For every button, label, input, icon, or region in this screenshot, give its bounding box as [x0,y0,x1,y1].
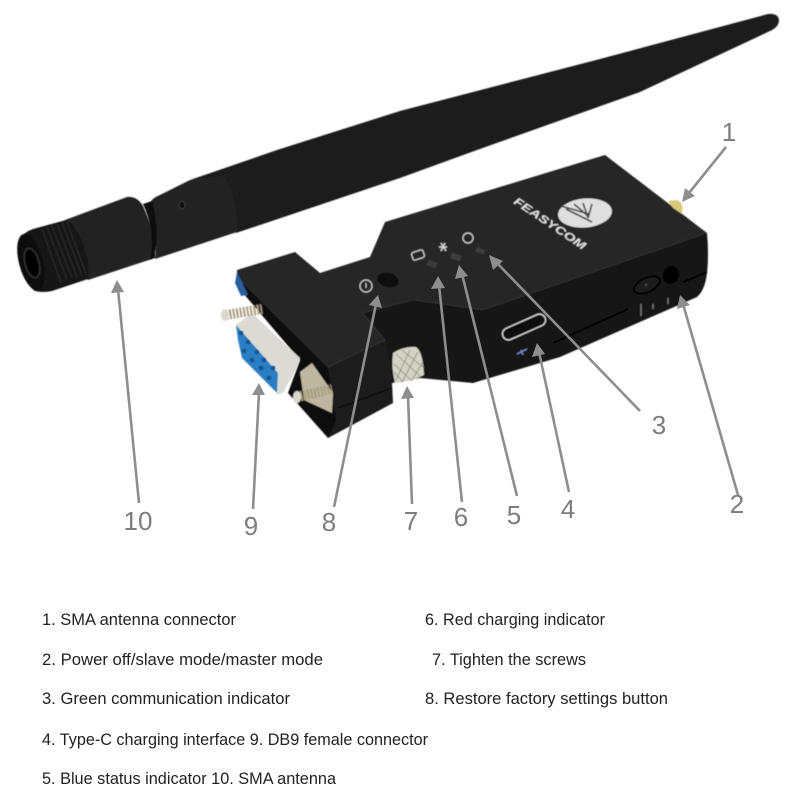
switch marks [641,298,668,316]
SMA nut opening [12,231,50,293]
arrow 2 [677,295,738,495]
device side wall [363,233,708,383]
label 1: 1 [722,117,736,147]
green LED [475,247,485,255]
bluetooth icon [439,243,447,251]
side groove [553,272,707,343]
legend item 3: 3. Green communication indicator [42,690,291,708]
arrow 9 [252,383,265,509]
housing seam [338,388,392,408]
DB9 blue face [236,325,278,393]
logo disc [557,196,613,230]
antenna collar mark [179,201,185,209]
lower screw [293,389,332,403]
USB-C port [501,312,547,342]
slide switch [631,263,682,297]
legend [42,611,668,788]
legend item 6: 6. Red charging indicator [425,611,605,629]
DB9 housing front [328,340,393,438]
device top face [237,155,707,367]
arrow 10 [111,280,139,503]
arrow 5 [455,265,517,496]
upper screw [221,309,262,321]
knurled SMA nut [18,220,89,292]
rear SMA connector [668,200,682,214]
label 8: 8 [322,507,336,537]
battery icon [411,249,425,261]
housing left edge [235,272,248,296]
brand name: FEASYCOM [511,196,589,253]
legend item 4 and 9: 4. Type-C charging interface 9. DB9 female connector [42,731,428,749]
power icon [463,233,473,243]
arrow 3 [489,255,640,411]
DB9 connector shell [236,313,300,395]
antenna neck [143,201,157,260]
DB9 pin holes [239,331,275,380]
legend item 1: 1. SMA antenna connector [42,611,236,629]
knurled thumb screw [392,347,424,383]
arrow 4 [532,343,569,492]
arrow 7 [401,386,414,504]
legend item 8: 8. Restore factory settings button [425,690,668,708]
label 6: 6 [454,502,468,532]
knurl ridges [42,222,86,283]
housing recess backing [237,277,340,438]
label 7: 7 [404,506,418,536]
blue LED [450,252,462,262]
antenna collar [150,176,238,259]
label 2: 2 [730,489,744,519]
mounting plate [300,363,333,413]
label 10: 10 [124,506,152,536]
USB icon [517,349,527,355]
legend item 7: 7. Tighten the screws [432,651,586,669]
arrow 1 [682,147,726,202]
antenna whip [190,14,779,233]
antenna [12,14,779,293]
reset button [376,270,400,290]
red LED [426,259,438,269]
device [221,155,708,438]
arrow 6 [431,276,462,502]
legend item 2: 2. Power off/slave mode/master mode [42,651,323,669]
legend item 5 and 10: 5. Blue status indicator 10. SMA antenna [42,770,337,788]
label 3: 3 [652,410,666,440]
arrow 8 [334,295,382,507]
reset icon [360,280,372,292]
antenna sleeve [65,197,155,280]
label 9: 9 [244,511,258,541]
label 4: 4 [561,494,575,524]
label 5: 5 [507,500,521,530]
